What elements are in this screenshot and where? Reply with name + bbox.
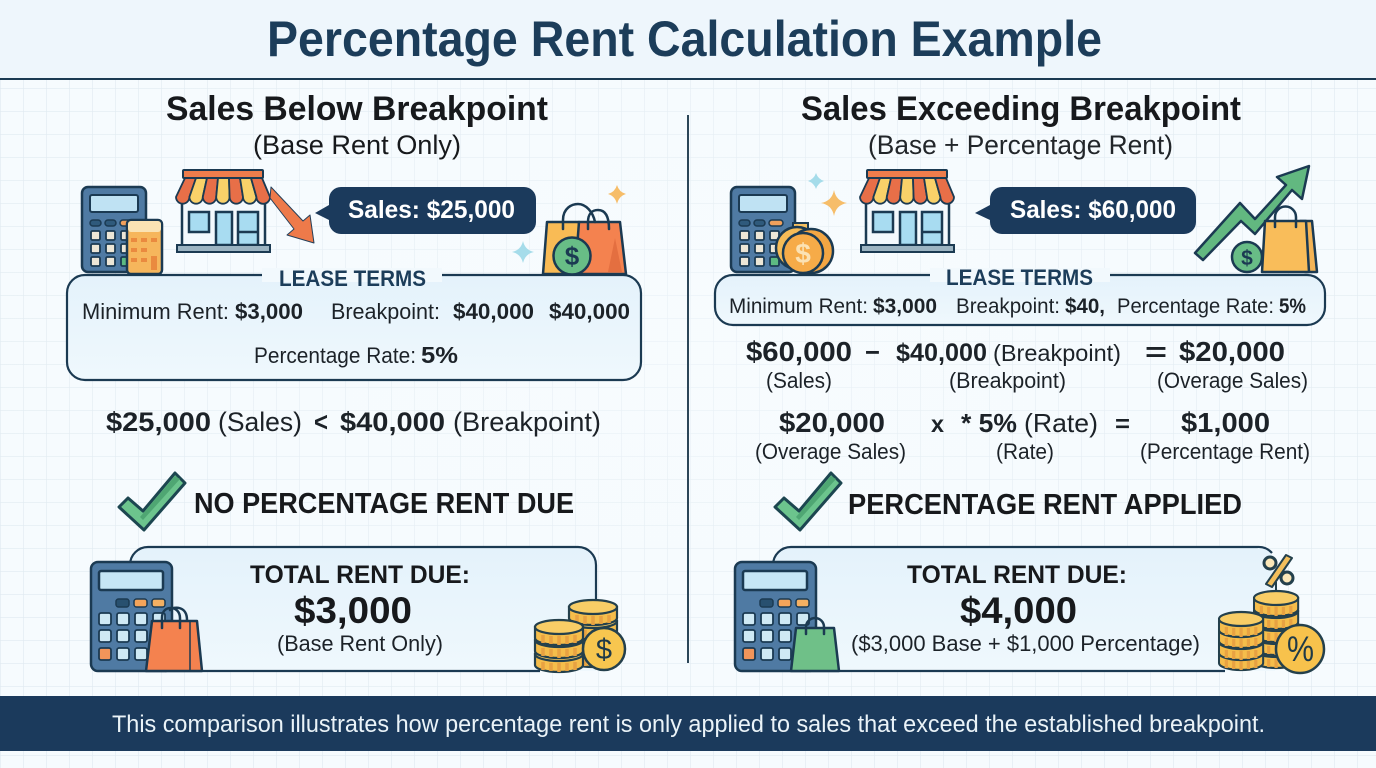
- heading: sales exceeding breakpoint: Sales Exceeding Breakpoint: [801, 90, 1241, 128]
- note: base rent only: (Base Rent Only): [277, 631, 443, 656]
- comparison line: [106, 407, 601, 437]
- percentage rate: Percentage Rate:: [254, 343, 416, 368]
- calculation: percentage rent: $1,000: [1181, 407, 1270, 438]
- calculation: percentage rent: [755, 407, 1310, 464]
- result: percentage rent applied: PERCENTAGE RENT APPLIED: [848, 489, 1242, 521]
- panel: lease terms: [715, 265, 1325, 325]
- label: total rent due: TOTAL RENT DUE:: [907, 561, 1127, 589]
- icon: coin stacks with percent: [1219, 555, 1324, 673]
- icon: check mark: [775, 473, 841, 530]
- calculation: percentage rent: =: [1115, 411, 1130, 438]
- calculation: percentage rent: $20,000: [779, 407, 885, 438]
- calculation: overage sales: (Breakpoint): [993, 340, 1121, 366]
- icon: calculator: [735, 562, 816, 671]
- terms row: $40,000: [453, 299, 534, 324]
- terms row: 5%: [1279, 295, 1306, 318]
- divider: [687, 115, 689, 663]
- calculation: percentage rent: (Overage Sales): [755, 439, 906, 464]
- calculation: overage sales: =: [1145, 337, 1167, 367]
- icon: calculator with orange calculator: [82, 187, 162, 274]
- icon: green shopping bag: [791, 618, 839, 671]
- icon: shopping bag, coin and rising arrow: [1195, 166, 1317, 272]
- icon: check mark: [119, 473, 185, 530]
- footer banner: This comparison illustrates how percentage rent is only applied to sales that exceed the established breakpoint.: [112, 711, 1265, 738]
- panel: sales below breakpoint: [67, 90, 641, 672]
- icon: downward arrow: [270, 187, 314, 243]
- icon: shopping bag, coin and rising arrow: $: [1241, 247, 1253, 270]
- calculation: overage sales: $20,000: [1179, 336, 1285, 367]
- icon: orange sparkle: [821, 190, 847, 216]
- subheading: base plus percentage rent: (Base + Percentage Rent): [868, 130, 1173, 160]
- icon: shopping bags with dollar coin: [543, 204, 626, 274]
- icon: calculator with coins: $: [795, 238, 811, 269]
- terms row: $3,000: [235, 299, 303, 324]
- calculation: percentage rent: (Percentage Rent): [1140, 439, 1310, 464]
- terms row: Minimum Rent:: [82, 299, 229, 324]
- calculation: overage sales: (Breakpoint): [949, 368, 1066, 393]
- title banner: Percentage Rent Calculation Example: [267, 11, 1102, 67]
- label: total rent due: TOTAL RENT DUE:: [250, 561, 470, 589]
- terms row: Breakpoint:: [956, 295, 1060, 318]
- icon: calculator with coins: [731, 187, 833, 273]
- terms row: Percentage Rate:: [1117, 295, 1274, 318]
- icon: storefront: [860, 170, 954, 252]
- terms row: $40,: [1065, 295, 1105, 318]
- callout: sales 60,000: [975, 187, 1196, 234]
- comparison line: <: [314, 407, 328, 437]
- note: base plus percentage: ($3,000 Base + $1,000 Percentage): [851, 631, 1200, 656]
- terms row: [729, 295, 1306, 318]
- heading: lease terms: LEASE TERMS: [946, 265, 1093, 290]
- terms row: [82, 299, 630, 324]
- calculation: percentage rent: x: [931, 411, 944, 437]
- icon: coin stacks with dollar: [535, 600, 625, 672]
- panel: sales exceeding breakpoint: [715, 90, 1325, 673]
- footer banner: [0, 696, 1376, 751]
- comparison line: (Breakpoint): [453, 407, 601, 437]
- value: 4,000: $4,000: [960, 590, 1077, 631]
- comparison line: $25,000: [106, 407, 211, 437]
- calculation: overage sales: (Sales): [766, 368, 832, 393]
- subheading: base rent only: (Base Rent Only): [253, 130, 461, 160]
- icon: orange sparkle: [608, 185, 626, 204]
- icon: blue sparkle: [512, 241, 534, 263]
- comparison line: (Sales): [218, 407, 302, 437]
- panel: total rent due: [91, 547, 625, 672]
- calculation: overage sales: $60,000: [746, 336, 852, 367]
- calculation: overage sales: [746, 336, 1308, 393]
- calculation: percentage rent: (Rate): [996, 439, 1054, 464]
- icon: orange shopping bag: [146, 608, 202, 671]
- icon: shopping bags with dollar coin: $: [565, 241, 580, 271]
- result: no percentage rent due: NO PERCENTAGE RENT DUE: [194, 488, 574, 520]
- panel: lease terms: [67, 266, 641, 380]
- icon: storefront: [176, 170, 270, 252]
- terms row: Minimum Rent:: [729, 295, 868, 318]
- heading: sales below breakpoint: Sales Below Breakpoint: [166, 90, 548, 128]
- comparison line: $40,000: [340, 407, 445, 437]
- callout: sales 25,000: Sales: $25,000: [348, 196, 515, 224]
- callout: sales 25,000: [315, 187, 536, 234]
- value: 3,000: $3,000: [294, 590, 412, 631]
- percentage rate: 5%: [421, 342, 458, 368]
- icon: coin stacks with dollar: $: [596, 634, 612, 666]
- callout: sales 60,000: Sales: $60,000: [1010, 196, 1176, 224]
- terms row: $3,000: [873, 295, 937, 318]
- calculation: overage sales: (Overage Sales): [1157, 368, 1308, 393]
- terms row: $40,000: [549, 299, 630, 324]
- panel: total rent due: [735, 547, 1324, 673]
- icon: calculator: [91, 562, 172, 671]
- icon: coin stacks with percent: %: [1287, 630, 1314, 669]
- calculation: overage sales: $40,000: [896, 339, 987, 367]
- calculation: percentage rent: (Rate): [1024, 408, 1098, 438]
- terms row: Breakpoint:: [331, 299, 440, 324]
- calculation: overage sales: −: [865, 337, 880, 367]
- heading: lease terms: LEASE TERMS: [279, 266, 426, 291]
- title banner: [0, 0, 1376, 80]
- calculation: percentage rent: * 5%: [961, 408, 1017, 438]
- icon: blue sparkle: [808, 173, 824, 189]
